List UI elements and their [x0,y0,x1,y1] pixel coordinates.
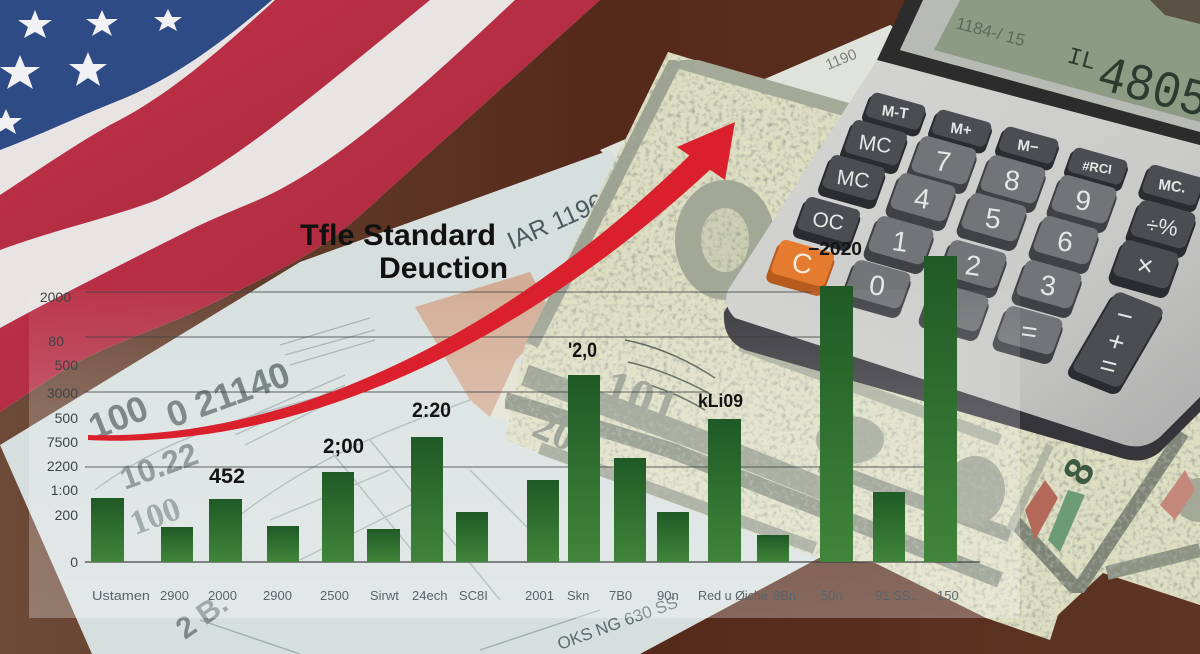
number keys: 0 [867,269,887,302]
calculator: screen top shade [1150,0,1200,24]
calculator [724,0,1200,460]
function key row: M-T [881,102,909,123]
calculator: keypad [764,91,1200,396]
y-axis labels: 500 [55,410,78,426]
American flag [0,0,600,412]
y-axis labels: 1:00 [51,482,78,498]
left memory keys: MC [857,131,893,158]
flag: white cloth [0,0,600,412]
bar value labels: 2:20 [412,399,451,422]
paper print: large numbers: OKS NG 630 SS [555,593,680,654]
chart title: Deuction [379,252,508,285]
y-axis labels: 2200 [47,458,78,474]
bar value labels [209,239,862,488]
chart title [300,219,508,285]
bar 3 [209,499,242,562]
bar 1 [91,498,124,562]
operator keys: − [1112,299,1138,332]
left memory keys: MC [835,166,871,193]
orange clear key [764,238,838,298]
number keys: 4 [912,182,932,215]
bar 7 [411,437,443,562]
chart title: Tfle Standard [300,219,496,252]
left memory keys [791,118,911,253]
x-axis labels [92,588,959,603]
bill: numeral on right note: 8 [1055,451,1104,492]
bar 6 [367,529,400,562]
calculator: silver body [726,60,1200,446]
bar value labels: '2,0 [568,339,597,362]
stack of dollar bills: 200 [526,402,602,470]
paper print: portrait note [415,272,555,417]
bar 16 [873,492,905,562]
y-axis labels [40,289,78,570]
x-axis labels: 2900 [160,588,189,603]
bar 12 [657,512,689,562]
calculator: screen readout: 1184-/ 15 [954,14,1027,50]
chart gridlines [85,292,980,562]
bar 5 [322,472,354,562]
y-axis labels: 7500 [47,434,78,450]
y-axis labels: 3000 [47,385,78,401]
calculator: green screen [934,0,1200,122]
number keys: = [1019,315,1039,348]
bills: cream paper base [505,52,1200,640]
calculator: screen readout: IL [1064,44,1099,77]
paper print: large numbers: 100 [83,387,154,447]
function key row [860,91,1200,214]
paper print: large numbers: IAR 1196 [503,188,608,255]
function key row: M− [1016,137,1040,156]
x-axis labels: 8Bn [773,588,796,603]
paper print: large numbers: 2 B. [170,587,234,646]
number keys: 1 [890,225,910,258]
bar 9 [527,480,559,562]
operator keys: × [1135,249,1155,282]
translucent chart panel [29,290,1020,618]
bar 8 [456,512,488,562]
bar chart [91,256,957,562]
flag: stars [0,9,182,134]
bar value labels: 452 [209,465,245,488]
stack of dollar bills [505,52,1200,640]
number keys: 7 [933,145,953,178]
paper print: form lines [95,318,600,654]
arrow head [677,122,735,180]
paper print: large numbers: 1190 [823,46,859,74]
bill: seal medallions [675,180,1200,524]
x-axis labels: 50n [821,588,843,603]
y-axis labels: 0 [70,554,78,570]
x-axis labels: 2900 [263,588,292,603]
x-axis labels: 2001 [525,588,554,603]
bills: engraved bands [505,60,1200,593]
y-axis labels: 80 [48,333,64,349]
paper: back sheet behind calculator [600,25,960,320]
paper print: small note [490,362,580,435]
number keys [838,134,1120,366]
bar value labels: −2020 [808,239,862,259]
x-axis labels: Ustamen [92,588,150,603]
calculator: dark underside [724,74,1200,460]
bill: handwritten signature lines [625,340,715,410]
paper print: large numbers: 100 [125,490,186,543]
operator keys: + [1104,325,1129,358]
x-axis labels: Sirwt [370,588,399,603]
bar value labels: 2;00 [323,435,364,458]
paper print: large numbers: 0 21140 [161,353,295,436]
operator keys: ÷% [1145,212,1179,241]
x-axis labels: SC8I [459,588,488,603]
bill: large numerals: 101 [596,358,686,436]
flag: blue canton [0,0,272,150]
function key row: #RCI [1081,158,1113,177]
calculator: display bezel [900,0,1200,132]
x-axis labels: Skn [567,588,589,603]
paper print: large numbers: 10.22 [115,435,203,497]
number keys: 8 [1002,164,1022,197]
flag: upper red stripe [0,0,430,250]
function key row: M+ [949,120,973,139]
x-axis labels: Red u Øiche [698,588,768,603]
bar 13 [708,419,741,562]
number keys: 2 [963,249,983,282]
document papers [0,25,960,654]
y-axis labels: 2000 [40,289,71,305]
left memory keys: OC [811,208,845,235]
operator keys [1065,198,1199,396]
paper print: large numbers [83,46,859,654]
x-axis labels: 91 SS.. [875,588,918,603]
bar 11 [614,458,646,562]
y-axis labels: 200 [55,507,78,523]
bar 2 [161,527,193,562]
x-axis labels: 7B0 [609,588,632,603]
number keys: 5 [983,202,1003,235]
bar 10 [568,375,600,562]
arrow shaft [88,150,712,441]
number keys: 6 [1055,225,1075,258]
bar 4 [267,526,299,562]
bar 15 [820,286,853,562]
x-axis labels: 2500 [320,588,349,603]
red growth arrow [88,122,735,441]
x-axis labels: 24ech [412,588,447,603]
bar 14 [757,535,789,562]
calculator: black display frame [877,0,1200,145]
flag: lower red stripe [0,0,600,412]
function key row: MC. [1157,176,1187,197]
x-axis labels: 2000 [208,588,237,603]
number keys: 3 [1038,269,1058,302]
x-axis labels: 90n [657,588,679,603]
paper: front printed sheet [0,150,819,654]
y-axis labels: 500 [55,357,78,373]
bar value labels: kLi09 [698,391,743,411]
orange clear key: C [790,247,814,280]
x-axis labels: 150 [937,588,959,603]
number keys: 9 [1073,184,1093,217]
bill: red and green print [1025,480,1058,540]
calculator: screen readout [954,14,1200,132]
bar 17 [924,256,957,562]
operator keys: = [1096,349,1121,382]
